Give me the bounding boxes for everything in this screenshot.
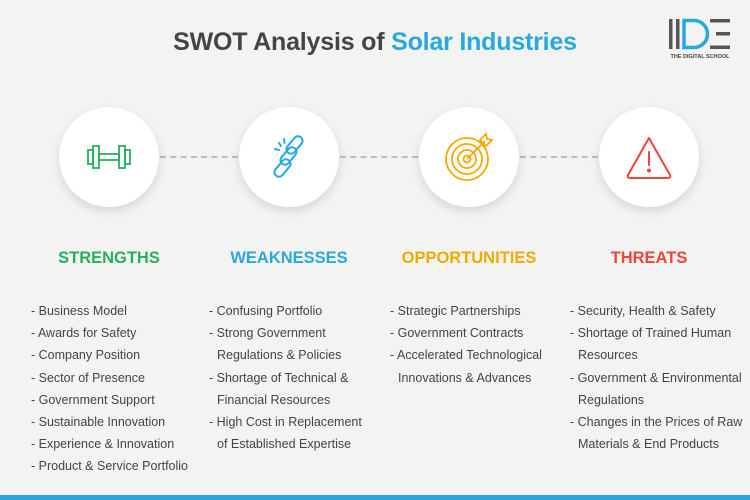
list: threats: - Shortage of Trained Human xyxy=(570,326,731,340)
heading: strengths: STRENGTHS xyxy=(58,248,160,267)
list: strengths: - Sustainable Innovation xyxy=(31,415,165,429)
list: strengths: - Company Position xyxy=(31,348,140,362)
list: opportunities: - Government Contracts xyxy=(390,326,523,340)
list: strengths: - Experience & Innovation xyxy=(31,437,174,451)
icon: warning xyxy=(599,107,699,207)
list: weaknesses: - Strong Government xyxy=(209,326,326,340)
list: strengths: - Awards for Safety xyxy=(31,326,136,340)
bottom bar xyxy=(0,495,750,500)
icon: target xyxy=(419,107,519,207)
logo xyxy=(669,18,730,60)
title: SWOT Analysis of Solar Industries xyxy=(173,28,577,56)
list: opportunities: Innovations & Advances xyxy=(398,371,531,385)
list: weaknesses: - High Cost in Replacement xyxy=(209,415,362,429)
list: strengths xyxy=(31,304,188,473)
list: strengths: - Product & Service Portfolio xyxy=(31,459,188,473)
list: strengths: - Business Model xyxy=(31,304,127,318)
list: opportunities xyxy=(390,304,542,385)
list: threats: Regulations xyxy=(578,393,644,407)
list: strengths: - Sector of Presence xyxy=(31,371,145,385)
list: threats: - Government & Environmental xyxy=(570,371,742,385)
list: weaknesses: Regulations & Policies xyxy=(217,348,341,362)
list: weaknesses: Financial Resources xyxy=(217,393,330,407)
list: opportunities: - Accelerated Technological xyxy=(390,348,542,362)
logo: THE DIGITAL SCHOOL xyxy=(670,54,730,60)
list: threats: - Changes in the Prices of Raw xyxy=(570,415,742,429)
list: threats: Materials & End Products xyxy=(578,437,719,451)
heading: threats: THREATS xyxy=(611,248,687,267)
list: threats: Resources xyxy=(578,348,638,362)
heading: weaknesses: WEAKNESSES xyxy=(230,248,348,267)
list: threats xyxy=(570,304,742,451)
icon: dumbbell xyxy=(59,107,159,207)
list: weaknesses: of Established Expertise xyxy=(217,437,351,451)
heading: opportunities: OPPORTUNITIES xyxy=(402,248,536,267)
list: opportunities: - Strategic Partnerships xyxy=(390,304,521,318)
icon: broken chain xyxy=(239,107,339,207)
list: weaknesses: - Shortage of Technical & xyxy=(209,371,348,385)
list: weaknesses: - Confusing Portfolio xyxy=(209,304,322,318)
connector dashes xyxy=(160,156,598,158)
list: strengths: - Government Support xyxy=(31,393,155,407)
list: weaknesses xyxy=(209,304,362,451)
list: threats: - Security, Health & Safety xyxy=(570,304,716,318)
